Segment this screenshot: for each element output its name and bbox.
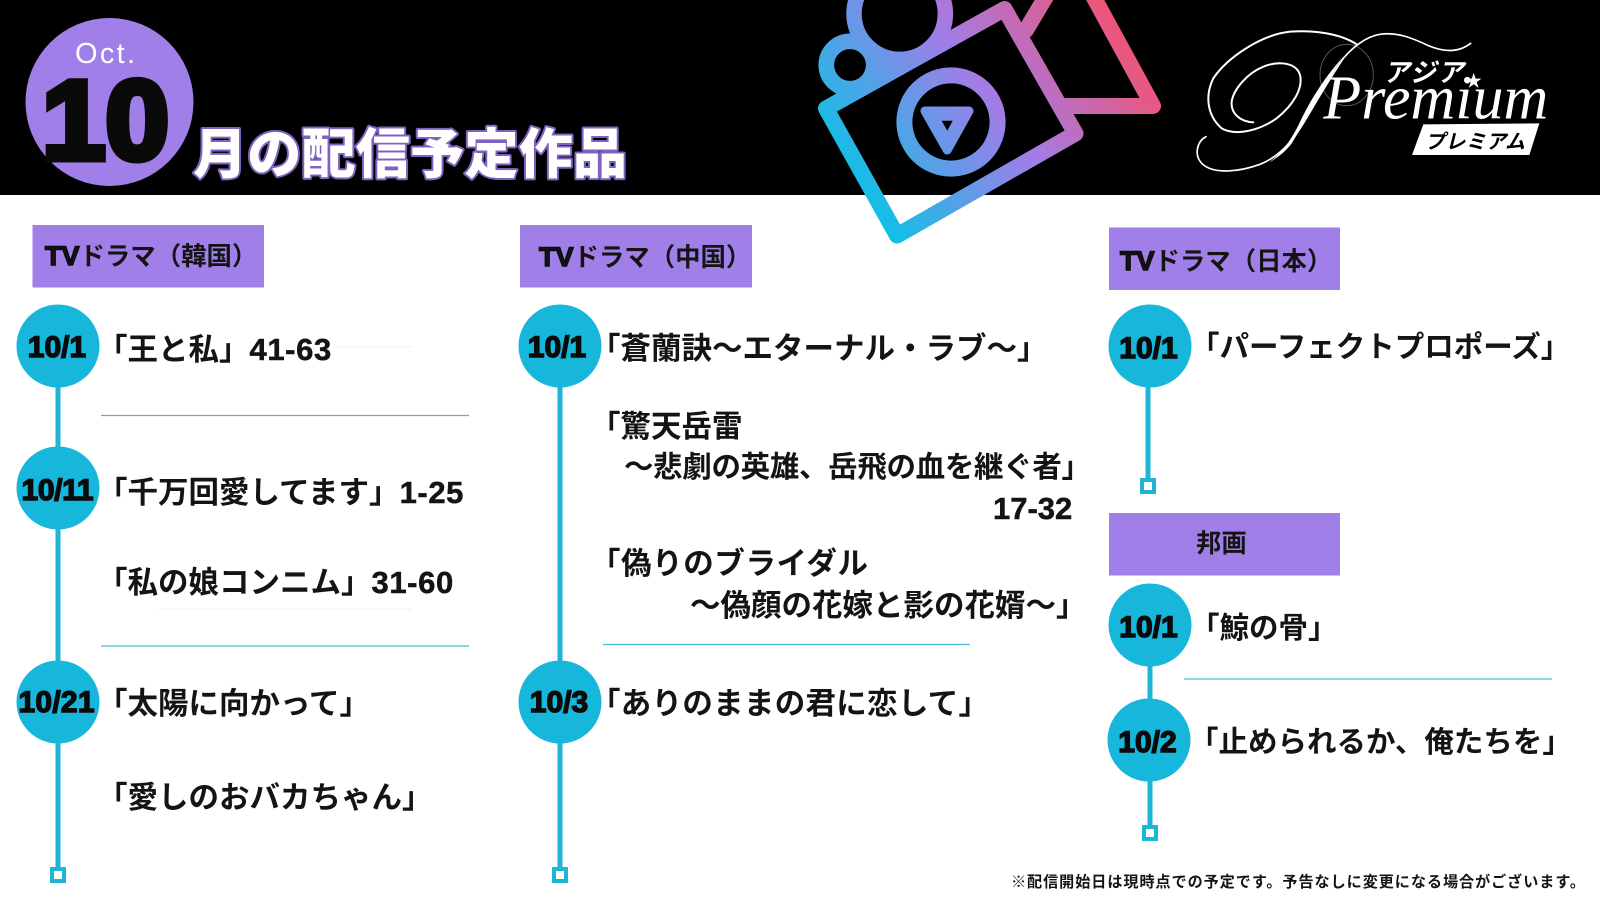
titles 10/1: 17-32 [993,491,1072,526]
date 10/21 [16,660,100,744]
date 10/1 [1108,584,1192,666]
heading: films: 邦画 [1196,530,1247,558]
titles 10/1: 「鯨の骨」 [1190,612,1338,645]
titles 10/21: 「太陽に向かって」 [97,687,370,721]
logo star: ★ [1465,71,1482,90]
footnote: ※配信開始日は現時点での予定です。予告なしに変更になる場合がございます。 [1011,873,1585,891]
titles 10/1: 「王と私」41-63 [97,332,332,367]
timeline line [52,346,64,881]
titles 10/21 [97,687,432,815]
date 10/1 [16,304,100,388]
titles 10/11: 「私の娘コンニム」31-60 [97,565,454,600]
big number: 10 [42,58,169,183]
titles 10/2: 「止められるか、俺たちを」 [1189,726,1572,759]
date 10/1 [1108,304,1192,388]
heading: Chinese [520,225,752,288]
camera icon [826,0,1153,236]
date 10/1: 10/1 [28,331,86,364]
date 10/1: 10/1 [528,331,586,364]
date 10/1: 10/1 [1119,332,1178,365]
titles 10/21: 「愛しのおバカちゃん」 [97,781,432,815]
logo swash [1197,31,1471,171]
logo katakana: アジア [1383,58,1467,88]
date 10/1 [518,304,602,388]
logo badge text: プレミアム [1425,130,1525,153]
titles 10/3: 「ありのままの君に恋して」 [590,687,989,721]
titles 10/11: 「千万回愛してます」1-25 [97,475,464,510]
column: Korean TV drama [16,225,469,881]
date 10/3 [518,660,602,744]
month badge [26,18,194,186]
date 10/3: 10/3 [530,686,588,719]
column: Japanese TV drama [1108,228,1570,492]
month label: Oct. [75,38,135,70]
date 10/11: 10/11 [22,474,94,507]
header band [0,0,1600,195]
timeline line [554,346,566,881]
column: Japanese films [1108,513,1572,839]
logo badge [1412,123,1539,155]
date 10/1: 10/1 [1119,611,1178,644]
date 10/2 [1108,698,1190,782]
timeline line [1142,346,1154,492]
date 10/21: 10/21 [18,686,94,719]
heading: Japanese: TVドラマ（日本） [1120,246,1332,276]
titles 10/1: ～偽顔の花嫁と影の花婿～」 [690,589,1086,623]
title: 月の配信予定作品 [193,125,627,185]
timeline line [1144,625,1156,839]
titles 10/11 [97,475,464,600]
date 10/2: 10/2 [1118,726,1177,759]
date 10/11 [16,446,100,530]
titles 10/1: 「蒼蘭訣～エターナル・ラブ～」 [590,331,1048,366]
heading: Chinese: TVドラマ（中国） [539,242,751,272]
titles 10/1: ～悲劇の英雄、岳飛の血を継ぐ者」 [624,451,1091,484]
heading: Japanese [1109,228,1340,290]
titles 10/1: 「驚天岳雷 [590,410,742,444]
titles 10/1 [590,331,1091,623]
heading: Korean: TVドラマ（韓国） [45,241,257,271]
column: Chinese TV drama [518,225,1091,881]
logo wordmark: Premium [1322,64,1548,132]
titles 10/1: 「偽りのブライダル [590,546,868,581]
logo: Asia Premium [1197,31,1548,171]
heading: Korean [32,225,264,288]
titles 10/1: 「パーフェクトプロポーズ」 [1190,330,1570,364]
heading: films [1109,513,1340,576]
